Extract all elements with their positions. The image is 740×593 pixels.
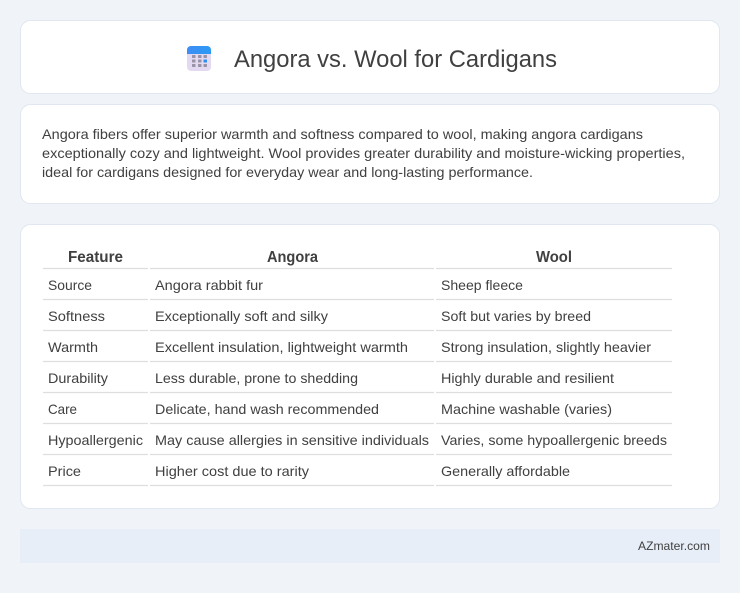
row: Price xyxy=(48,463,570,479)
row: Softness: Softness xyxy=(48,308,105,324)
row: Durability: Durability xyxy=(48,370,108,386)
row: Warmth: Strong insulation, slightly heavier xyxy=(441,339,651,355)
row: Care: Delicate, hand wash recommended xyxy=(155,401,379,417)
table header row: Angora xyxy=(267,249,318,266)
footer bar xyxy=(20,529,720,563)
row: Source: Source xyxy=(48,277,92,293)
row: Durability: Less durable, prone to shedding xyxy=(155,370,358,386)
row: Warmth xyxy=(48,339,651,355)
row: Price: Price xyxy=(48,463,81,479)
row: Hypoallergenic: May cause allergies in sensitive individuals xyxy=(155,432,429,448)
title: Angora vs. Wool for Cardigans xyxy=(234,46,557,73)
row: Softness xyxy=(48,308,591,324)
row: Durability: Highly durable and resilient xyxy=(441,370,614,386)
row: Care xyxy=(48,401,612,417)
row: Hypoallergenic xyxy=(48,432,667,448)
row: Warmth: Warmth xyxy=(48,339,98,355)
row: Warmth: Excellent insulation, lightweight warmth xyxy=(155,339,408,355)
row: Price: Higher cost due to rarity xyxy=(155,463,309,479)
table header row: Wool xyxy=(536,249,572,266)
row: Source: Sheep fleece xyxy=(441,277,523,293)
intro paragraph: exceptionally cozy and lightweight. Wool provides greater durability and moisture-wicking properties, xyxy=(42,145,685,161)
row: Care: Care xyxy=(48,401,77,417)
table header row xyxy=(68,249,572,266)
row: Hypoallergenic: Varies, some hypoallergenic breeds xyxy=(441,432,667,448)
icon: calendar xyxy=(187,46,211,71)
row: Hypoallergenic: Hypoallergenic xyxy=(48,432,143,448)
panel: title header xyxy=(20,20,720,94)
intro paragraph: Angora fibers offer superior warmth and softness compared to wool, making angora cardigans xyxy=(42,126,643,142)
row: Source: Angora rabbit fur xyxy=(155,277,263,293)
panel: intro text xyxy=(20,104,720,204)
row: Softness: Soft but varies by breed xyxy=(441,308,591,324)
row: Price: Generally affordable xyxy=(441,463,570,479)
panel: comparison table xyxy=(20,224,720,508)
footer brand: AZmater.com xyxy=(638,539,710,553)
table header row: Feature xyxy=(68,249,123,266)
row: Durability xyxy=(48,370,614,386)
row: Source xyxy=(48,277,523,293)
row: Care: Machine washable (varies) xyxy=(441,401,612,417)
intro paragraph xyxy=(42,126,685,180)
intro paragraph: ideal for cardigans designed for everyday wear and long-lasting performance. xyxy=(42,164,533,180)
row: Softness: Exceptionally soft and silky xyxy=(155,308,328,324)
